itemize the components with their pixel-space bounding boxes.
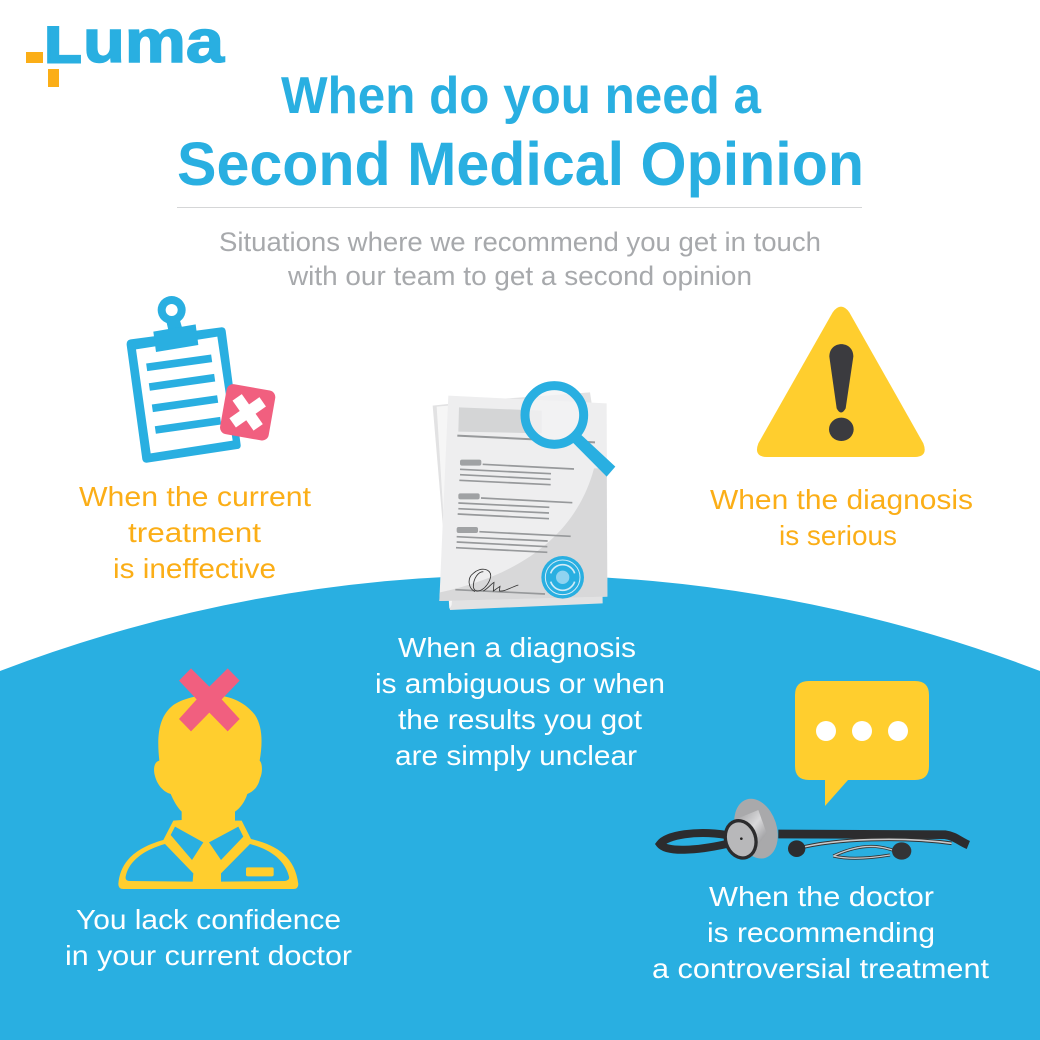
caption: serious diagnosis: is serious	[779, 520, 897, 551]
icon: documents with magnifier	[433, 386, 615, 610]
subtitle	[177, 207, 862, 291]
caption: controversial treatment	[652, 881, 989, 984]
caption: ambiguous diagnosis: When a diagnosis	[398, 632, 636, 663]
logo: Luma: uma	[83, 8, 225, 75]
caption: lack confidence: in your current doctor	[65, 940, 352, 971]
caption: ambiguous diagnosis: is ambiguous or when	[375, 668, 665, 699]
caption: lack confidence: You lack confidence	[76, 904, 341, 935]
caption: serious diagnosis: When the diagnosis	[710, 484, 973, 515]
caption: controversial treatment: When the doctor	[709, 881, 934, 912]
caption: current treatment: When the current	[79, 481, 311, 512]
caption: controversial treatment: is recommending	[707, 917, 935, 948]
title: When do you need a	[281, 67, 762, 125]
caption: serious diagnosis	[710, 484, 973, 551]
subtitle: Situations where we recommend you get in touch	[219, 227, 821, 257]
blue arc background	[0, 575, 1040, 1040]
title	[177, 67, 864, 198]
logo: Luma	[26, 8, 225, 87]
icon: speech bubble	[795, 681, 929, 806]
title: Second Medical Opinion	[177, 130, 864, 198]
caption: ambiguous diagnosis: the results you got	[398, 704, 642, 735]
caption: current treatment	[79, 481, 311, 584]
logo: Luma: L	[45, 17, 81, 73]
icon: stethoscope	[660, 793, 968, 864]
caption: ambiguous diagnosis: are simply unclear	[395, 740, 637, 771]
icon: doctor with cross	[118, 668, 298, 889]
icon: warning triangle	[757, 307, 925, 457]
caption: ambiguous diagnosis	[375, 632, 665, 771]
icon: clipboard with x	[127, 296, 276, 463]
caption: current treatment: is ineffective	[113, 553, 276, 584]
subtitle: with our team to get a second opinion	[287, 261, 752, 291]
caption: lack confidence	[65, 904, 352, 971]
caption: current treatment: treatment	[128, 517, 261, 548]
caption: controversial treatment: a controversial treatment	[652, 953, 989, 984]
